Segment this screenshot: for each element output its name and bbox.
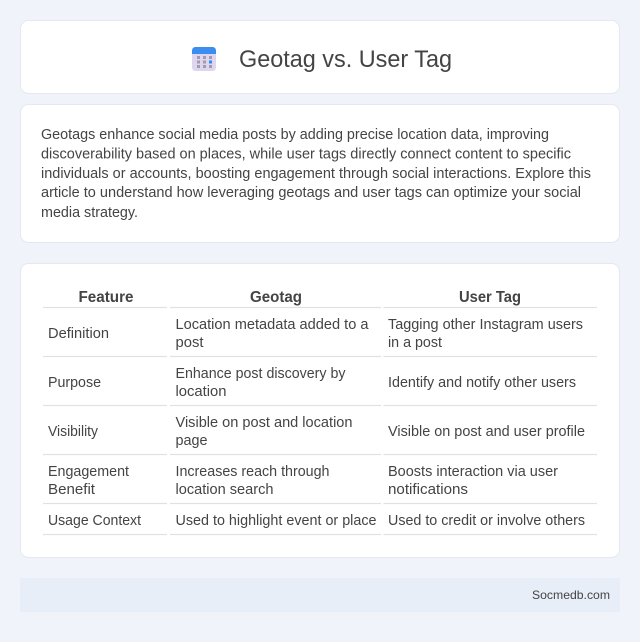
text block: introduction: media strategy. [41, 205, 138, 221]
table row: engagement benefit [48, 464, 558, 498]
text block: introduction: individuals or accounts, boosting engagement through social interactions. Explore this [41, 166, 591, 182]
text block: introduction: article to understand how leveraging geotags and user tags can optimize your social [41, 185, 581, 201]
panel: introduction [20, 104, 620, 242]
table row: definition: in a post [388, 335, 442, 351]
table row: visibility: Visible on post and user profile [388, 424, 585, 440]
text block: introduction: Geotags enhance social media posts by adding precise location data, improving [41, 127, 549, 143]
table header: Geotag [250, 289, 302, 306]
footer text: Socmedb.com [532, 588, 610, 602]
table row: purpose: Identify and notify other users [388, 375, 576, 391]
table row: visibility: Visible on post and location [176, 415, 352, 431]
table row: purpose: Purpose [48, 375, 101, 391]
table row: engagement benefit: notifications [388, 482, 468, 498]
table row: usage context [48, 513, 585, 529]
table row: engagement benefit: Boosts interaction via user [388, 464, 558, 480]
table header: User Tag [459, 289, 521, 306]
icon: calendar [192, 47, 216, 71]
table row: engagement benefit: Engagement [48, 464, 129, 480]
table row: definition: post [176, 335, 204, 351]
table row: engagement benefit: Increases reach through [176, 464, 330, 480]
table row: engagement benefit: location search [176, 482, 274, 498]
table row: definition: Definition [48, 326, 109, 342]
table row: purpose [48, 366, 576, 400]
footer bar [20, 578, 620, 612]
text block: introduction [41, 127, 591, 221]
table row: usage context: Used to highlight event or place [176, 513, 376, 529]
title: Geotag vs. User Tag [239, 46, 452, 73]
table row: definition: Location metadata added to a [176, 317, 369, 333]
table row: definition: Tagging other Instagram users [388, 317, 583, 333]
table row: usage context: Usage Context [48, 513, 141, 529]
panel: comparison table [20, 264, 620, 558]
text block: introduction: discoverability based on places, while user tags directly connect content to specific [41, 146, 571, 162]
table row: purpose: location [176, 384, 226, 400]
table row: definition [48, 317, 583, 351]
table row: purpose: Enhance post discovery by [176, 366, 346, 382]
table row: visibility [48, 415, 585, 449]
table header: Feature [78, 289, 134, 306]
table row: usage context: Used to credit or involve others [388, 513, 585, 529]
table header [78, 289, 521, 306]
table row: visibility: page [176, 433, 208, 449]
table row: engagement benefit: Benefit [48, 482, 95, 498]
table row: visibility: Visibility [48, 424, 99, 440]
panel: header [20, 20, 620, 94]
table grid lines [43, 308, 597, 534]
